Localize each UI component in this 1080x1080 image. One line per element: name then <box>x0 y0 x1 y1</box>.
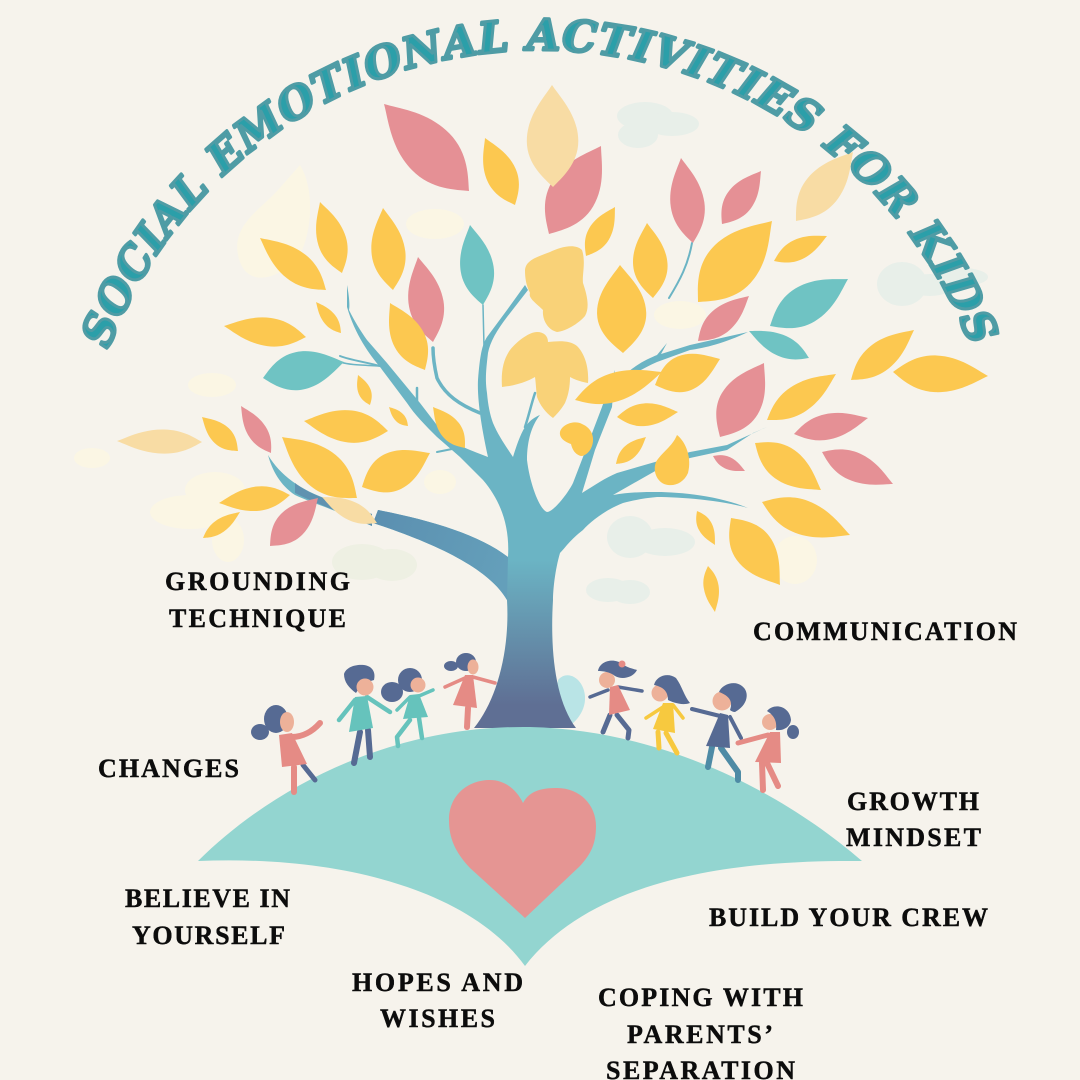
label: growth mindset <box>846 787 981 852</box>
leaves: teal <box>259 222 858 397</box>
hill <box>198 727 862 966</box>
boy in navy <box>692 683 747 780</box>
label: hopes and wishes: HOPES AND <box>352 968 523 997</box>
faint background clouds <box>74 102 988 604</box>
title: SOCIAL EMOTIONAL ACTIVITIES FOR KIDS <box>82 17 1000 350</box>
label: coping with parents' separation <box>598 983 803 1080</box>
label: grounding technique <box>165 567 350 633</box>
label: grounding technique: TECHNIQUE <box>169 604 346 633</box>
pale heart behind trunk <box>555 675 585 728</box>
girl in pink dress near trunk <box>444 653 495 727</box>
leaves: pink <box>233 86 899 557</box>
label: hopes and wishes <box>352 968 523 1033</box>
label: growth mindset: MINDSET <box>846 823 981 852</box>
girl in yellow dress <box>646 675 690 753</box>
girl in pink dress, far left <box>251 705 320 792</box>
leaves: pale <box>117 85 867 532</box>
children: left group <box>251 653 495 792</box>
label: changes: CHANGES <box>98 754 239 783</box>
label: believe in yourself: YOURSELF <box>132 921 285 950</box>
yellow leaf overlapping pink leaf <box>376 296 439 377</box>
label: build your crew: BUILD YOUR CREW <box>709 903 988 932</box>
boy in teal shirt <box>339 665 390 763</box>
label: believe in yourself <box>125 884 290 950</box>
label: coping with parents' separation: COPING WITH <box>598 983 803 1012</box>
label: growth mindset: GROWTH <box>847 787 979 816</box>
label: believe in yourself: BELIEVE IN <box>125 884 290 913</box>
label: communication: COMMUNICATION <box>753 617 1017 646</box>
girl with flower <box>590 660 642 738</box>
label: coping with parents' separation: PARENTS’ <box>627 1020 773 1049</box>
large soft yellow leaves <box>502 246 588 418</box>
leaves: yellow <box>195 132 989 613</box>
tree trunk and branches <box>268 243 767 728</box>
heart <box>449 780 596 918</box>
children: right group <box>590 660 799 790</box>
girl in pink, far right <box>738 706 799 790</box>
label: grounding technique: GROUNDING <box>165 567 350 596</box>
label: hopes and wishes: WISHES <box>380 1004 495 1033</box>
girl in teal dress <box>381 668 433 746</box>
